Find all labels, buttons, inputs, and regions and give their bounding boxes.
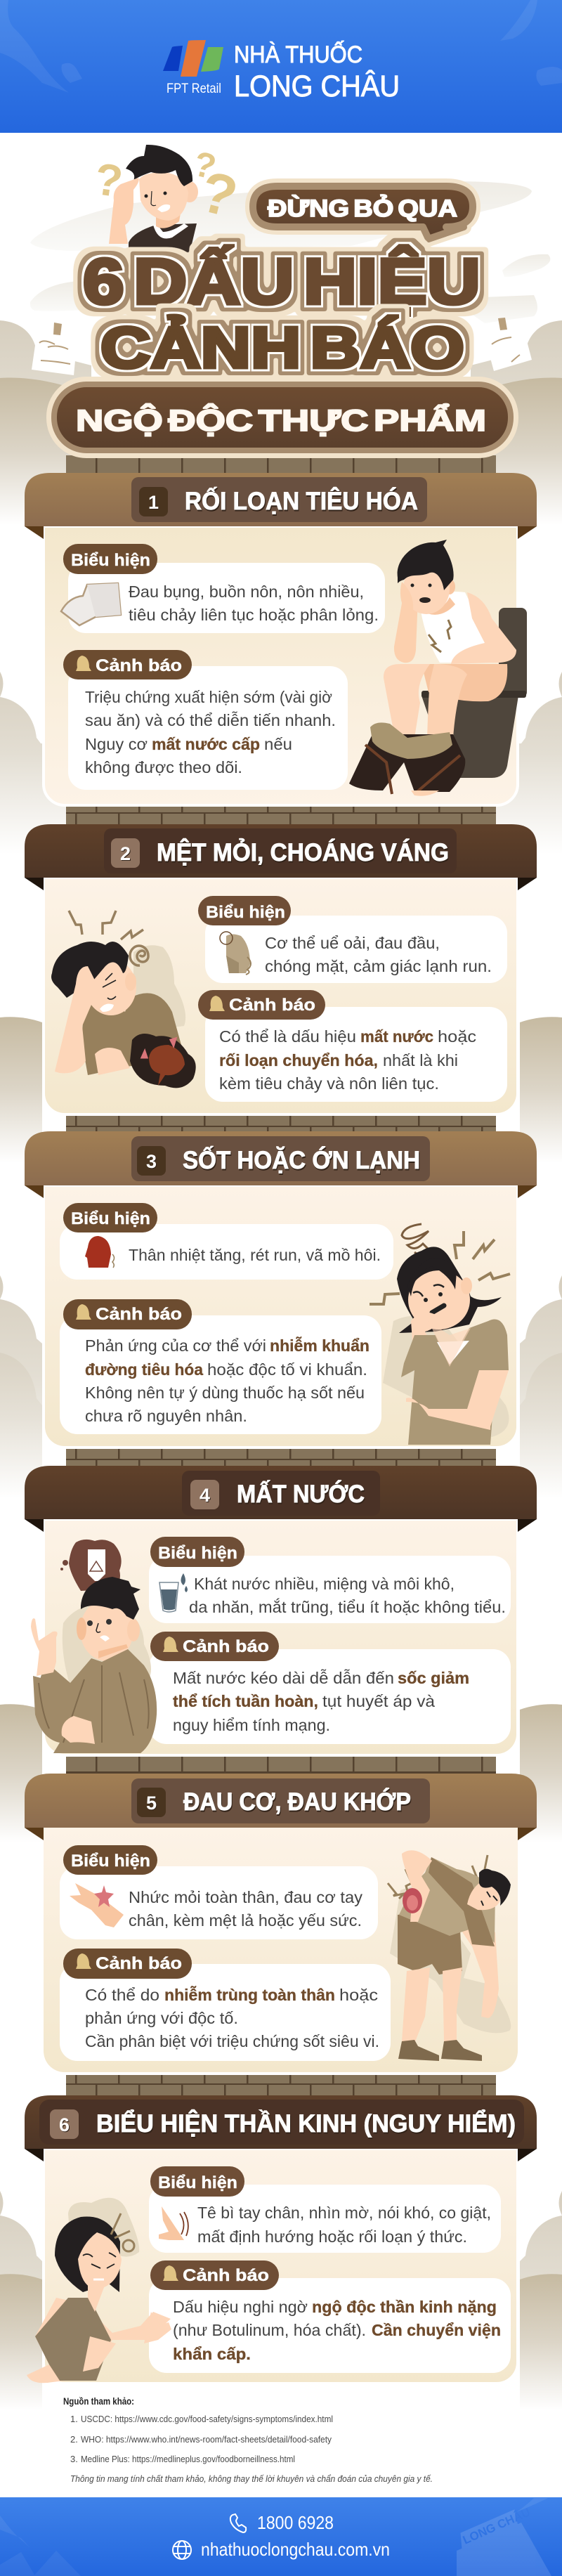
title: 6 dấu hiệu: 6 DẤU HIỆU: [83, 245, 481, 318]
icon: dizzy head: [220, 932, 251, 975]
section heading: [25, 1774, 537, 1840]
FPT Retail wordmark: FPT Retail: [166, 82, 221, 96]
text: cảnh báo 3: chưa rõ nguyên nhân.: [85, 1407, 247, 1425]
text: cảnh báo 1: Triệu chứng xuất hiện sớm (vài giờ: [85, 688, 332, 706]
brick band 5-6: [66, 2075, 496, 2096]
brick band 1-2: [66, 807, 496, 825]
references: [63, 2395, 433, 2484]
text: cảnh báo 3: Phản ứng của cơ thể với: [85, 1336, 266, 1355]
text: biểu hiện 2: Cơ thể uể oải, đau đầu,: [265, 934, 440, 952]
text: cảnh báo 1: [85, 688, 336, 776]
text: cảnh báo 1: không được theo dõi.: [85, 758, 242, 776]
label: biểu hiện: Biểu hiện: [71, 1852, 150, 1871]
text: cảnh báo 6: ngộ độc thần kinh nặng: [312, 2298, 497, 2316]
speech bubble: đừng bỏ qua: ĐỪNG BỎ QUA: [268, 195, 457, 222]
background clouds right: [464, 320, 562, 2410]
title background shapes: [30, 181, 550, 323]
section heading: 4: [200, 1485, 210, 1506]
illustration: woman with numbness: [27, 2198, 171, 2383]
text: cảnh báo 5: nhiễm trùng toàn thân: [164, 1985, 335, 2004]
text: biểu hiện 3: Thân nhiệt tăng, rét run, vã mồ hôi.: [129, 1246, 381, 1264]
brand name: LONG CHÂU: [234, 70, 400, 103]
panel 1: rối loạn tiêu hóa: [25, 473, 537, 805]
references: Nguồn tham khảo:: [63, 2395, 134, 2407]
label: cảnh báo: [63, 650, 348, 790]
text: cảnh báo 2: Có thể là dấu hiệu: [219, 1027, 356, 1046]
text: cảnh báo 2: kèm tiêu chảy và nôn liên tục.: [219, 1074, 439, 1093]
references: Medline Plus: https://medlineplus.gov/foodborneillness.html: [81, 2454, 295, 2464]
label: biểu hiện: [149, 1537, 511, 1623]
section heading: MỆT MỎI, CHOÁNG VÁNG: [157, 838, 449, 866]
label: cảnh báo: [198, 990, 507, 1102]
notes: paper left: [32, 323, 78, 375]
label: biểu hiện: [60, 1845, 378, 1939]
panel 5: đau cơ, đau khớp: [25, 1774, 537, 2072]
panel 4: mất nước: [25, 1466, 537, 1755]
icon: painful hand: [70, 1883, 124, 1927]
text: cảnh báo 3: nhiễm khuẩn: [270, 1336, 370, 1355]
label: biểu hiện: [60, 1203, 393, 1280]
label: cảnh báo: [149, 2260, 511, 2373]
label: biểu hiện: Biểu hiện: [158, 1544, 237, 1563]
text: cảnh báo 6: Cần chuyển viện: [372, 2321, 501, 2339]
brick band 4-5: [66, 1757, 496, 1774]
text: cảnh báo 5: Cần phân biệt với triệu chứng sốt siêu vi.: [85, 2032, 379, 2050]
references: Thông tin mang tính chất tham khảo, không thay thế lời khuyên và chẩn đoán của chuyên gia y tế.: [70, 2473, 433, 2484]
panel 2: mệt mỏi, choáng váng: [25, 824, 537, 1114]
title plate: ngộ độc thực phẩm: NGỘ ĐỘC THỰC PHẨM: [76, 403, 486, 438]
references: WHO: https://www.who.int/news-room/fact-sheets/detail/food-safety: [81, 2434, 332, 2445]
label: cảnh báo: Cảnh báo: [96, 656, 182, 675]
label: cảnh báo: Cảnh báo: [96, 1305, 182, 1324]
text: cảnh báo 2: hoặc: [438, 1027, 476, 1046]
icon: numb hand: [159, 2206, 188, 2240]
icon: phone: [230, 2514, 246, 2532]
question marks: ?: [194, 160, 244, 230]
section heading: BIỂU HIỆN THẦN KINH (NGUY HIỂM): [96, 2109, 516, 2138]
text: cảnh báo 3: Không nên tự ý dùng thuốc hạ sốt nếu: [85, 1384, 365, 1402]
label: cảnh báo: [149, 1632, 511, 1744]
section heading: RỐI LOẠN TIÊU HÓA: [185, 487, 418, 515]
section heading: 5: [146, 1793, 157, 1814]
section heading: 1: [148, 492, 159, 513]
section heading: MẤT NƯỚC: [237, 1480, 365, 1508]
text: cảnh báo 1: Nguy cơ: [85, 735, 148, 753]
label: biểu hiện: Biểu hiện: [71, 551, 150, 570]
text: cảnh báo 5: hoặc: [339, 1986, 378, 2004]
text: cảnh báo 3: đường tiêu hóa: [85, 1360, 203, 1379]
panel 3: sốt hoặc ớn lạnh: [25, 1131, 537, 1448]
label: cảnh báo: [60, 1299, 381, 1434]
text: biểu hiện 5: chân, kèm mệt lả hoặc yếu sức.: [129, 1911, 362, 1930]
references: 2.: [70, 2434, 78, 2445]
section heading: [25, 1466, 537, 1532]
illustration: man with headache: [51, 911, 196, 1088]
brick column under the title: [66, 455, 496, 474]
illustration: dehydrated man: [31, 1540, 157, 1753]
label: biểu hiện: Biểu hiện: [71, 1209, 150, 1228]
icon: FPT logo: [163, 40, 223, 77]
brick band 2-3: [66, 1116, 496, 1133]
text: biểu hiện 5: [129, 1888, 363, 1930]
text: cảnh báo 2: [219, 1027, 476, 1093]
text: biểu hiện 1: tiêu chảy liên tục hoặc phân lỏng.: [129, 606, 379, 624]
references: 3.: [70, 2454, 78, 2464]
text: biểu hiện 4: Khát nước nhiều, miệng và môi khô,: [194, 1575, 455, 1593]
icon: glass of water: [159, 1573, 188, 1612]
label: cảnh báo: Cảnh báo: [183, 2266, 269, 2285]
brick band 3-4: [66, 1449, 496, 1466]
website: nhathuoclongchau.com.vn: [201, 2539, 390, 2560]
text: cảnh báo 2: nhất là khi: [383, 1051, 458, 1069]
text: biểu hiện 1: [129, 583, 379, 624]
label: cảnh báo: Cảnh báo: [96, 1954, 182, 1973]
label: biểu hiện: [149, 2166, 501, 2253]
illustration: woman with chills: [370, 1224, 510, 1445]
text: cảnh báo 4: thể tích tuần hoàn,: [173, 1692, 318, 1710]
label: cảnh báo: Cảnh báo: [229, 996, 315, 1015]
label: biểu hiện: Biểu hiện: [206, 903, 285, 922]
references: USCDC: https://www.cdc.gov/food-safety/signs-symptoms/index.html: [81, 2414, 333, 2424]
background clouds left: [0, 320, 98, 2410]
section heading: [25, 1131, 537, 1198]
section heading: 6: [59, 2114, 70, 2135]
label: biểu hiện: [198, 896, 507, 983]
title: cảnh báo: CẢNH BÁO: [100, 314, 464, 380]
text: cảnh báo 4: sốc giảm: [398, 1669, 469, 1687]
question marks: ?: [91, 153, 126, 207]
text: biểu hiện 6: Tê bì tay chân, nhìn mờ, nói khó, co giật,: [197, 2204, 491, 2222]
text: cảnh báo 6: (như Botulinum, hóa chất).: [173, 2321, 366, 2339]
label: cảnh báo: [60, 1949, 391, 2061]
header band: [0, 0, 562, 133]
section heading: SỐT HOẶC ỚN LẠNH: [183, 1146, 420, 1174]
brand name: [234, 41, 400, 103]
text: cảnh báo 1: nếu: [264, 735, 292, 753]
icon: tissue: [61, 583, 121, 625]
text: cảnh báo 3: [85, 1336, 370, 1425]
label: biểu hiện: Biểu hiện: [158, 2173, 237, 2192]
speech bubble: đừng bỏ qua: [253, 186, 473, 239]
text: cảnh báo 4: tụt huyết áp và: [322, 1692, 435, 1710]
section heading: [25, 2095, 537, 2161]
text: biểu hiện 6: [197, 2204, 491, 2246]
section heading: 2: [120, 843, 131, 864]
illustration: man with back pain: [388, 1850, 511, 2061]
text: cảnh báo 6: khẩn cấp.: [173, 2345, 251, 2363]
notes: paper right: [483, 318, 532, 371]
text: cảnh báo 5: Có thể do: [85, 1986, 159, 2004]
icon: globe: [173, 2541, 191, 2559]
section heading: [25, 473, 537, 539]
icon: feverish head: [85, 1236, 114, 1268]
phone number: 1800 6928: [257, 2512, 334, 2533]
text: cảnh báo 6: [173, 2298, 501, 2363]
brand name: NHÀ THUỐC: [234, 41, 362, 68]
illustration: confused man: [91, 143, 244, 253]
text: cảnh báo 4: [173, 1669, 469, 1734]
text: cảnh báo 4: Mất nước kéo dài dễ dẫn đến: [173, 1669, 394, 1687]
question marks: ?: [190, 143, 220, 187]
text: cảnh báo 6: Dấu hiệu nghi ngờ: [173, 2298, 308, 2316]
text: biểu hiện 6: mất định hướng hoặc rối loạn ý thức.: [197, 2227, 467, 2246]
title plate: ngộ độc thực phẩm: [54, 384, 511, 450]
building watermark: [457, 2505, 551, 2576]
text: biểu hiện 2: [265, 934, 492, 975]
text: biểu hiện 1: Đau bụng, buồn nôn, nôn nhiều,: [129, 583, 364, 601]
text: biểu hiện 4: da nhăn, mắt trũng, tiểu ít hoặc không tiểu.: [189, 1598, 506, 1616]
section heading: [25, 824, 537, 890]
section heading: ĐAU CƠ, ĐAU KHỚP: [183, 1788, 411, 1816]
building watermark: LONG CHÂU: [461, 2505, 532, 2547]
footer band: [0, 2497, 562, 2576]
panel body: [44, 526, 518, 805]
text: cảnh báo 3: hoặc độc tố vi khuẩn.: [207, 1360, 367, 1379]
text: cảnh báo 2: rối loạn chuyển hóa,: [219, 1051, 378, 1069]
illustration: man on toilet: [349, 540, 527, 796]
text: biểu hiện 5: Nhức mỏi toàn thân, đau cơ tay: [129, 1888, 363, 1906]
text: cảnh báo 1: mất nước cấp: [152, 735, 260, 753]
text: biểu hiện 2: chóng mặt, cảm giác lạnh run.: [265, 957, 492, 975]
label: cảnh báo: Cảnh báo: [183, 1637, 269, 1656]
text: cảnh báo 4: nguy hiểm tính mạng.: [173, 1716, 330, 1734]
label: biểu hiện: [63, 544, 385, 633]
references: 1.: [70, 2414, 78, 2424]
text: biểu hiện 4: [189, 1575, 506, 1616]
text: cảnh báo 5: phản ứng với độc tố.: [85, 2009, 238, 2027]
section heading: 3: [146, 1151, 157, 1172]
text: cảnh báo 2: mất nước: [360, 1027, 433, 1046]
panel 6: biểu hiện thần kinh: [25, 2095, 537, 2383]
question marks: [91, 143, 244, 230]
text: cảnh báo 5: [85, 1985, 379, 2050]
text: cảnh báo 1: sau ăn) và có thể diễn tiến nhanh.: [85, 711, 336, 729]
